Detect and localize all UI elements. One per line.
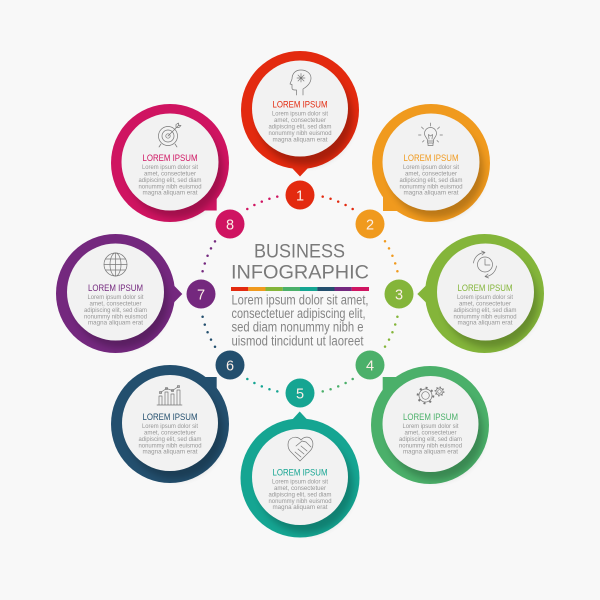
shadow 6 (128, 384, 223, 479)
panel 6: navy (111, 365, 229, 483)
shadow 7 (73, 253, 168, 348)
text block 3: Lorem ipsum dolor sit (457, 294, 513, 301)
panel 1: red (241, 51, 359, 176)
shadow 4 (388, 385, 483, 480)
text block 7: nonummy nibh euismod (84, 313, 148, 320)
text block 1: magna aliquam erat (272, 136, 328, 143)
shadow 8 (128, 123, 223, 218)
text block 4: amet, consectetuer (404, 430, 456, 436)
text block 2: magna aliquam erat (404, 190, 459, 197)
heading 6: LOREM IPSUM (142, 412, 198, 423)
text block 4: nonummy nibh euismod (399, 442, 463, 449)
icon: bar chart (157, 385, 182, 405)
number badge 8: 8 (226, 217, 234, 233)
text block 2: adipiscing elit, sed diam (400, 177, 462, 184)
icon: clock with arrows (474, 251, 496, 278)
text block 6: nonummy nibh euismod (138, 442, 202, 449)
text block 4 (399, 423, 463, 456)
text block 5: magna aliquam erat (272, 504, 328, 511)
text block 1: adipiscing elit, sed diam (268, 124, 332, 131)
text block 2 (400, 164, 463, 197)
shadow 3 (443, 253, 538, 348)
heading 4: LOREM IPSUM (403, 412, 458, 423)
ring 3 with pointer (417, 234, 544, 353)
text block 3 (454, 294, 517, 327)
shadow 2 (388, 123, 484, 218)
text block 4: adipiscing elit, sed diam (399, 436, 462, 443)
text block 7 (84, 294, 148, 327)
text block 6: adipiscing elit, sed diam (138, 436, 202, 443)
icon: handshake heart (288, 437, 313, 461)
number badge 6 (216, 350, 244, 380)
disc 1 (252, 60, 348, 156)
number badge 1: 1 (296, 188, 304, 204)
ring 4 with pointer (371, 366, 489, 484)
disc 2 (382, 114, 480, 210)
text block 8: adipiscing elit, sed diam (138, 177, 202, 184)
disc 3 (437, 244, 534, 340)
text block 8: nonummy nibh euismod (138, 183, 202, 190)
icon: light bulb (418, 123, 442, 146)
ring 1 with pointer (241, 51, 359, 176)
number badge 4: 4 (366, 358, 374, 374)
disc 7 (67, 244, 164, 340)
text block 5: Lorem ipsum dolor sit (272, 478, 328, 486)
text block 7: magna aliquam erat (88, 320, 143, 327)
title: INFOGRAPHIC (231, 262, 369, 284)
colour bar (231, 287, 369, 291)
intro text: Lorem ipsum dolor sit amet, (232, 292, 368, 307)
panel 7: purple (56, 234, 182, 353)
icon: globe (104, 253, 127, 276)
number badge 7: 7 (197, 287, 205, 303)
number badge 8 (216, 210, 244, 238)
dotted connector ring (203, 197, 397, 391)
number badge 3: 3 (395, 287, 403, 303)
ring 5 with pointer (240, 412, 360, 538)
text block 3: adipiscing elit, sed diam (454, 307, 516, 314)
text block 5: adipiscing elit, sed diam (268, 492, 332, 498)
text block 1: amet, consectetuer (274, 117, 326, 124)
text block 1: Lorem ipsum dolor sit (272, 111, 328, 118)
shadow 1 (258, 70, 352, 165)
icon: target (158, 123, 181, 147)
text block 6: magna aliquam erat (142, 449, 198, 456)
heading 2: LOREM IPSUM (404, 153, 459, 164)
intro text (232, 292, 368, 348)
title (231, 240, 369, 284)
intro text: sed diam nonummy nibh e (232, 320, 364, 335)
text block 3: nonummy nibh euismod (454, 313, 517, 320)
number badge 4 (356, 350, 384, 380)
panel 8: crimson (111, 104, 229, 222)
text block 6: amet, consectetuer (144, 430, 196, 436)
text block 7: adipiscing elit, sed diam (84, 307, 147, 314)
text block 1 (268, 111, 332, 143)
text block 5: amet, consectetuer (274, 485, 326, 492)
number badge 3 (384, 280, 414, 308)
heading 8: LOREM IPSUM (142, 153, 198, 164)
text block 6: Lorem ipsum dolor sit (142, 423, 198, 430)
shadow 5 (258, 438, 353, 533)
text block 8: amet, consectetuer (144, 170, 196, 178)
disc 6 (122, 375, 218, 471)
heading 1: LOREM IPSUM (272, 100, 328, 110)
ring 7 with pointer (56, 234, 182, 353)
number badge 6: 6 (226, 358, 234, 374)
text block 5: nonummy nibh euismod (268, 498, 332, 505)
text block 8: Lorem ipsum dolor sit (142, 164, 198, 171)
panel 2: orange (372, 104, 490, 222)
panel 5: teal (240, 412, 360, 538)
panel 4: green (371, 366, 489, 484)
intro text: uismod tincidunt ut laoreet (232, 333, 364, 348)
text block 4: Lorem ipsum dolor sit (402, 423, 459, 430)
text block 7: Lorem ipsum dolor sit (88, 294, 144, 301)
icon: gears (418, 387, 444, 403)
text block 8: magna aliquam erat (142, 190, 198, 197)
disc 4 (382, 376, 478, 472)
text block 3: magna aliquam erat (458, 320, 513, 327)
disc 8 (122, 114, 218, 210)
ring 6 with pointer (111, 365, 229, 483)
disc 5 (252, 429, 348, 525)
text block 3: amet, consectetuer (459, 300, 511, 308)
heading 5: LOREM IPSUM (272, 467, 328, 478)
number badge 2 (356, 210, 384, 238)
text block 2: amet, consectetuer (405, 170, 457, 178)
text block 4: magna aliquam erat (403, 449, 458, 456)
ring 8 with pointer (111, 104, 229, 222)
number badge 5 (286, 378, 314, 408)
text block 7: amet, consectetuer (90, 300, 142, 308)
text block 2: nonummy nibh euismod (400, 183, 463, 190)
heading 7: LOREM IPSUM (88, 283, 143, 294)
number badge 2: 2 (366, 217, 374, 233)
ring 2 with pointer (372, 104, 490, 222)
title: BUSINESS (254, 240, 345, 262)
text block 1: nonummy nibh euismod (268, 130, 332, 137)
panel 3: lime (417, 234, 544, 353)
intro text: consectetuer adipiscing elit, (232, 306, 366, 321)
text block 5 (268, 478, 332, 511)
icon: head (290, 70, 311, 95)
number badge 7 (186, 280, 216, 308)
text block 2: Lorem ipsum dolor sit (403, 164, 459, 171)
text block 6 (138, 423, 202, 456)
number badge 5: 5 (296, 386, 304, 402)
heading 3: LOREM IPSUM (458, 283, 513, 294)
text block 8 (138, 164, 202, 197)
number badge 1 (286, 180, 314, 210)
